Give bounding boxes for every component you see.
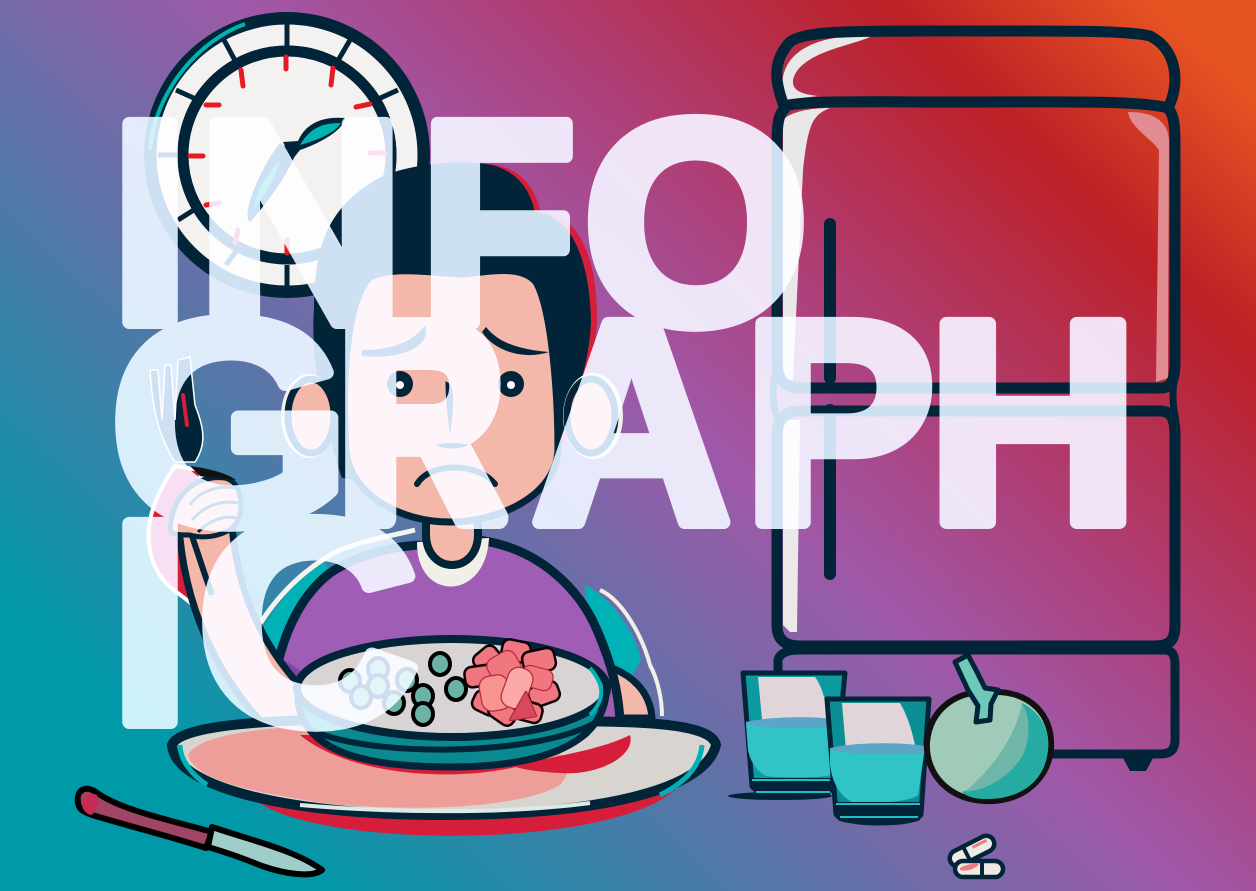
bowl rim — [297, 639, 607, 737]
shirt shade — [276, 656, 312, 695]
character: sad boy — [149, 162, 662, 745]
clock tick marks — [190, 57, 385, 253]
neck — [426, 505, 478, 565]
fridge door gap — [773, 372, 1176, 420]
fridge upper door — [777, 107, 1175, 388]
title line: INFO: I — [110, 62, 190, 384]
plate — [172, 720, 716, 836]
clock hands — [247, 118, 460, 222]
fridge — [773, 31, 1176, 771]
title line: GRAPH: R — [339, 269, 504, 577]
hair — [313, 162, 597, 500]
title line: INFO: N — [197, 62, 405, 384]
peas — [340, 653, 466, 725]
plate salmon reflection — [188, 724, 568, 808]
title line: GRAPH: A — [532, 262, 731, 584]
shirt — [270, 540, 620, 745]
title line: INFO: F — [420, 62, 576, 384]
title line: GRAPH: P — [743, 262, 935, 584]
eyes — [387, 371, 524, 397]
plate shadow — [250, 785, 680, 836]
plate body — [172, 720, 716, 815]
icon: wall clock — [144, 12, 460, 298]
fridge handles — [824, 224, 836, 574]
icon: glass front — [827, 699, 929, 824]
nose — [437, 382, 467, 448]
title line: INFO: O — [583, 62, 809, 384]
title: INFOGRAPHIC — [110, 62, 1139, 784]
fridge lower door — [777, 411, 1175, 646]
bowl base — [298, 695, 606, 767]
arm and hand — [149, 466, 305, 728]
hand — [170, 478, 241, 537]
fridge top section — [777, 31, 1175, 108]
shoulder halo — [250, 530, 415, 642]
title line: IC: I — [110, 462, 190, 784]
fridge foot — [1122, 756, 1154, 771]
strawberry pieces — [465, 639, 560, 727]
ears — [281, 373, 623, 459]
face — [345, 270, 558, 522]
title line: IC: C — [197, 462, 419, 784]
eyebrows — [362, 325, 549, 357]
apple stem — [955, 655, 998, 722]
collar — [417, 538, 489, 587]
icon: glass back — [728, 673, 845, 800]
fridge highlights — [782, 35, 1169, 632]
sleeves — [255, 562, 662, 718]
bowl with food — [297, 639, 607, 767]
forearm — [205, 520, 305, 728]
title line: GRAPH: H — [927, 262, 1139, 584]
plate rim accents — [180, 745, 702, 795]
icon: knife — [78, 789, 322, 874]
icon: pills — [947, 833, 1003, 877]
bowl shadow — [300, 735, 590, 774]
arm red shadow — [149, 466, 210, 615]
mouth — [417, 468, 495, 484]
red smear — [512, 735, 631, 773]
fridge base — [778, 650, 1175, 754]
icon: apple — [927, 655, 1051, 801]
title line: GRAPH: G — [110, 262, 350, 584]
fork — [150, 357, 248, 605]
